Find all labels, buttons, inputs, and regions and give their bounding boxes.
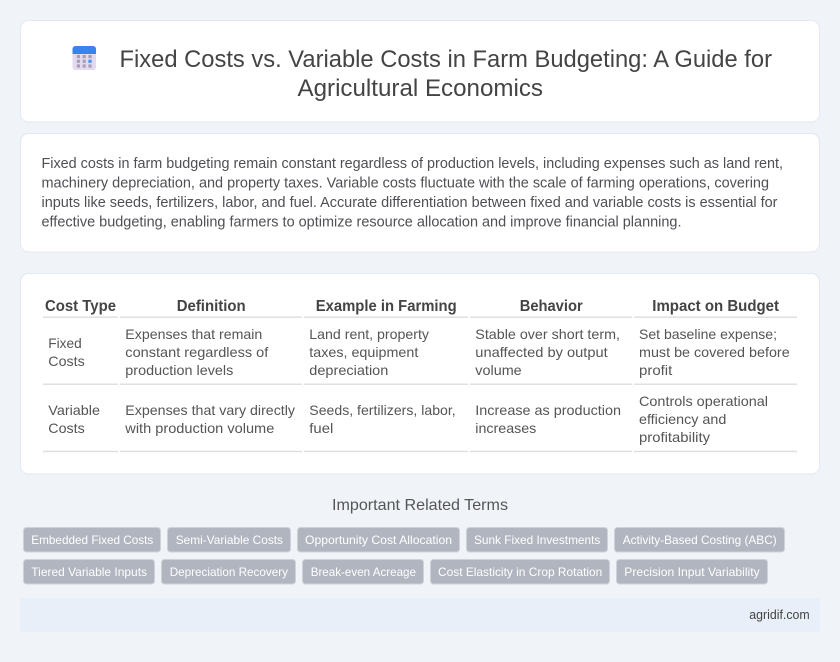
table row: fixed costs: Set baseline expense; bbox=[639, 326, 777, 342]
tag list: related terms: Semi-Variable Costs bbox=[176, 533, 283, 547]
table header row: Impact on Budget bbox=[652, 298, 779, 315]
table row: variable costs: profitability bbox=[639, 429, 710, 445]
table row: fixed costs: volume bbox=[475, 362, 522, 378]
table row: fixed costs: Fixed bbox=[48, 335, 82, 351]
table row: variable costs: Variable bbox=[48, 402, 100, 418]
footer: agridif.com bbox=[749, 607, 810, 622]
table row: fixed costs: Expenses that remain bbox=[125, 326, 262, 342]
panel: description bbox=[20, 134, 820, 252]
table row: fixed costs: unaffected by output bbox=[475, 344, 608, 360]
tag list: related terms: Cost Elasticity in Crop Rotation bbox=[438, 565, 602, 579]
tag list: related terms: Sunk Fixed Investments bbox=[474, 533, 600, 547]
table row: variable costs: Increase as production bbox=[475, 402, 621, 418]
tag list: related terms: Precision Input Variability bbox=[624, 565, 760, 579]
table row: fixed costs: production levels bbox=[125, 362, 233, 378]
table row: variable costs: fuel bbox=[309, 420, 333, 436]
tag list: related terms: Activity-Based Costing (ABC) bbox=[623, 533, 777, 547]
panel: comparison table bbox=[20, 274, 820, 474]
table row: fixed costs: profit bbox=[639, 362, 672, 378]
tag list: related terms: Embedded Fixed Costs bbox=[31, 533, 153, 547]
table row: variable costs: with production volume bbox=[124, 420, 275, 436]
title: Agricultural Economics bbox=[298, 75, 543, 102]
table header row: Definition bbox=[177, 298, 246, 315]
table header row bbox=[45, 298, 779, 315]
table row: variable costs: Seeds, fertilizers, labor, bbox=[309, 402, 456, 418]
table header row: Example in Farming bbox=[316, 298, 457, 315]
table row: fixed costs bbox=[48, 326, 790, 378]
table row: variable costs: Costs bbox=[48, 420, 85, 436]
table row: variable costs: Controls operational bbox=[639, 393, 768, 409]
text block: description bbox=[42, 156, 783, 230]
icon: calendar bbox=[72, 46, 96, 70]
heading: related terms: Important Related Terms bbox=[332, 497, 508, 514]
tag list: related terms: Break-even Acreage bbox=[311, 565, 416, 579]
tag list: related terms: Tiered Variable Inputs bbox=[31, 565, 147, 579]
table row: variable costs: efficiency and bbox=[639, 411, 726, 427]
table row: fixed costs: Stable over short term, bbox=[475, 326, 620, 342]
text block: description: inputs like seeds, fertilizers, labor, and fuel. Accurate differentiation between fixed and variable costs is essential for bbox=[42, 195, 778, 211]
title: Fixed Costs vs. Variable Costs in Farm Budgeting: A Guide for bbox=[120, 46, 772, 73]
table row: fixed costs: depreciation bbox=[309, 362, 388, 378]
table row: fixed costs: Costs bbox=[48, 353, 85, 369]
title bbox=[120, 46, 772, 102]
table header row: Behavior bbox=[520, 298, 583, 315]
table row: fixed costs: must be covered before bbox=[639, 344, 790, 360]
tag list: related terms: Opportunity Cost Allocation bbox=[305, 533, 452, 547]
table row: fixed costs: Land rent, property bbox=[309, 326, 429, 342]
tag list: related terms bbox=[24, 528, 784, 584]
table row: fixed costs: constant regardless of bbox=[125, 344, 268, 360]
table row: variable costs bbox=[48, 393, 768, 445]
table row: variable costs: Expenses that vary directly bbox=[125, 402, 295, 418]
text block: description: machinery depreciation, and property taxes. Variable costs fluctuate with the scale of farming operations, covering bbox=[42, 176, 769, 192]
text block: description: Fixed costs in farm budgeting remain constant regardless of production levels, including expenses such as land rent, bbox=[42, 156, 783, 172]
table row: fixed costs: taxes, equipment bbox=[309, 344, 418, 360]
text block: description: effective budgeting, enabling farmers to optimize resource allocation and improve financial planning. bbox=[42, 214, 681, 230]
panel: header bbox=[20, 20, 820, 122]
table header row: Cost Type bbox=[45, 298, 116, 315]
table row: variable costs: increases bbox=[475, 420, 536, 436]
footer bbox=[20, 598, 820, 632]
tag list: related terms: Depreciation Recovery bbox=[170, 565, 288, 579]
